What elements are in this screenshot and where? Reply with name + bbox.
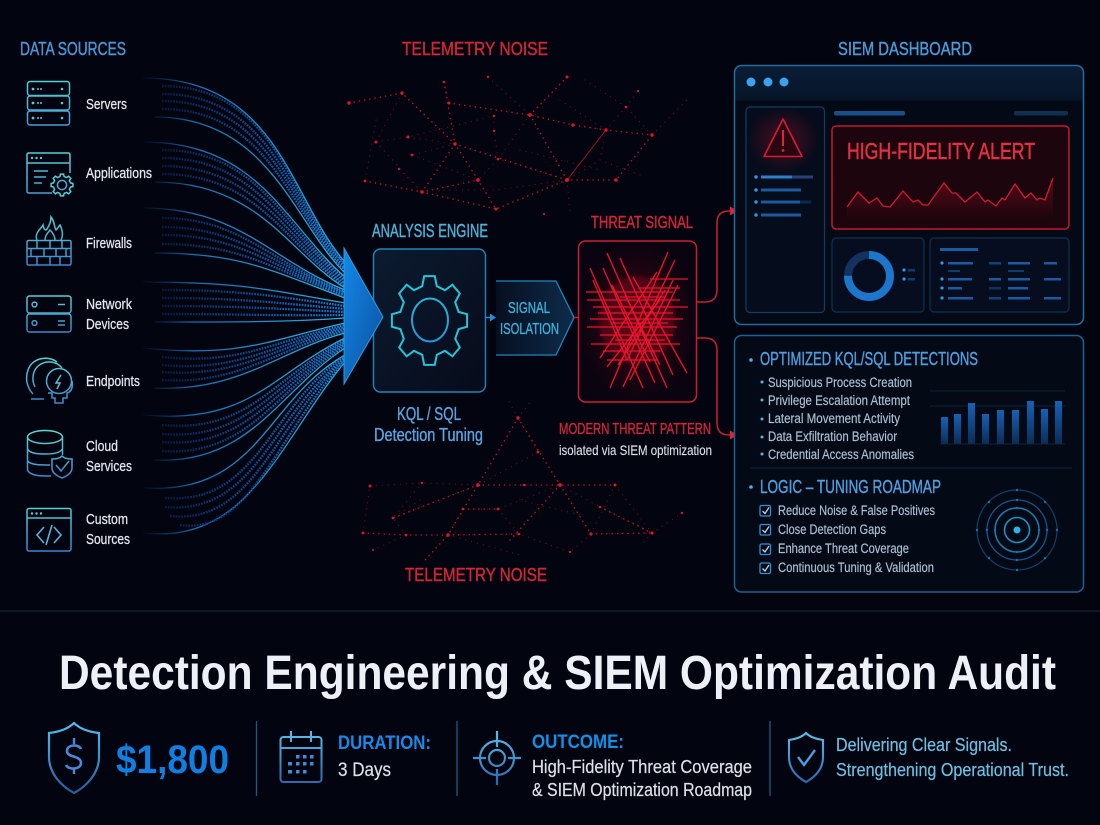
panel: analysis engine (374, 249, 486, 392)
radar target (976, 489, 1058, 571)
footer stats (49, 721, 1069, 800)
stream: applications (143, 142, 345, 288)
label: endpoints: Endpoints (86, 374, 140, 390)
threat pattern lines (586, 252, 688, 388)
arrow: threat to dashboard (697, 206, 738, 302)
duration text (338, 733, 431, 781)
section: optimized detections: Lateral Movement Activity (768, 411, 900, 426)
duration text: DURATION: (338, 733, 431, 754)
section: optimized detections (749, 349, 978, 462)
icon: firewall (27, 217, 71, 265)
icon: gear (392, 276, 467, 365)
tagline text: Delivering Clear Signals. (836, 735, 1012, 755)
icon: network devices (27, 296, 71, 332)
stream: firewalls (143, 208, 345, 298)
sidebar rows (754, 175, 813, 217)
outcome text: High-Fidelity Threat Coverage (532, 757, 752, 777)
caption: modern threat pattern: MODERN THREAT PATTERN (559, 421, 711, 438)
stream: custom sources (143, 355, 345, 534)
donut panel (832, 238, 924, 312)
section: tuning roadmap (749, 477, 941, 575)
connector: isolation to threat (574, 316, 579, 318)
section: optimized detections: Privilege Escalation Attempt (768, 393, 910, 408)
heading: SIEM dashboard: SIEM DASHBOARD (838, 39, 972, 59)
section: tuning roadmap: Reduce Noise & False Positives (778, 503, 935, 518)
caption: modern threat pattern (559, 421, 712, 458)
icon: custom sources (27, 508, 71, 551)
label: network devices (86, 297, 133, 333)
label: applications: Applications (86, 166, 152, 182)
noise network top (347, 76, 687, 215)
icon: crosshair target (473, 731, 521, 785)
checkboxes (760, 506, 770, 574)
icon: servers (28, 82, 70, 125)
signal isolation chevron: ISOLATION (500, 321, 559, 338)
icon: endpoints (27, 358, 72, 403)
bar chart (930, 391, 1065, 444)
heading: analysis engine: ANALYSIS ENGINE (372, 221, 488, 241)
signal isolation chevron (496, 281, 574, 355)
arrow: threat to detections (697, 338, 738, 440)
stream: servers (143, 78, 345, 273)
caption: KQL / SQL detection tuning (374, 404, 483, 445)
heading: threat signal: THREAT SIGNAL (591, 212, 693, 232)
panel: SIEM dashboard (734, 66, 1084, 324)
label: network devices: Devices (86, 317, 129, 333)
duration text: 3 Days (338, 760, 391, 781)
tagline text (836, 735, 1069, 780)
label: firewalls: Firewalls (86, 236, 132, 252)
label: custom sources (86, 512, 130, 548)
section: optimized detections: Credential Access Anomalies (768, 447, 914, 462)
caption: KQL / SQL detection tuning: KQL / SQL (397, 404, 461, 424)
section: tuning roadmap: Enhance Threat Coverage (778, 541, 909, 556)
label: network devices: Network (86, 297, 133, 313)
section: tuning roadmap: Close Detection Gaps (778, 522, 886, 537)
panel: detections and roadmap (734, 336, 1084, 592)
window dots (746, 78, 788, 86)
icon: check shield (789, 733, 823, 782)
stream: cloud services (143, 338, 345, 460)
section: tuning roadmap: LOGIC – TUNING ROADMAP (760, 477, 941, 497)
panel: threat signal (578, 241, 696, 402)
section: optimized detections: Suspicious Process Creation (768, 375, 912, 390)
stat: price (49, 723, 229, 793)
stat: tagline (789, 733, 1069, 782)
sidebar (746, 106, 824, 312)
top bars (834, 111, 1068, 116)
alert heading: HIGH-FIDELITY ALERT (847, 138, 1035, 164)
outcome text: OUTCOME: (532, 732, 624, 753)
donut legend (902, 268, 915, 281)
section: optimized detections: OPTIMIZED KQL/SQL DETECTIONS (760, 349, 978, 369)
donut chart (848, 255, 890, 297)
arrow: engine to isolation (486, 314, 496, 322)
label: cloud services (86, 439, 132, 475)
data source list (27, 82, 152, 551)
label: custom sources: Custom (86, 512, 128, 528)
section: optimized detections: Data Exfiltration Behavior (768, 429, 897, 444)
icon: calendar (280, 731, 322, 782)
icon: applications (27, 153, 73, 196)
caption: modern threat pattern: isolated via SIEM optimization (559, 442, 712, 458)
stream: endpoints (143, 323, 345, 388)
heading: telemetry noise top: TELEMETRY NOISE (402, 39, 548, 59)
noise network bottom (362, 398, 683, 560)
heading: telemetry noise bottom: TELEMETRY NOISE (405, 565, 547, 585)
icon: warning triangle (764, 119, 802, 156)
table panel (930, 238, 1069, 312)
label: cloud services: Cloud (86, 439, 118, 455)
icon: cloud services (28, 430, 72, 478)
icon: dollar shield (49, 723, 99, 793)
stat: outcome (473, 731, 752, 800)
caption: KQL / SQL detection tuning: Detection Tuning (374, 425, 483, 445)
data streams (143, 78, 345, 534)
label: custom sources: Sources (86, 532, 130, 548)
alert line chart (847, 178, 1053, 217)
arrow: streams into engine (344, 248, 383, 384)
outcome text: & SIEM Optimization Roadmap (532, 780, 752, 800)
alert panel (832, 126, 1069, 229)
stream: network devices (143, 282, 345, 322)
tagline text: Strengthening Operational Trust. (836, 760, 1069, 780)
section: tuning roadmap: Continuous Tuning & Validation (778, 560, 934, 575)
heading: data sources: DATA SOURCES (20, 39, 126, 59)
outcome text (532, 732, 752, 800)
signal isolation chevron: SIGNAL (508, 300, 550, 317)
price value: $1,800 (116, 738, 229, 782)
label: cloud services: Services (86, 459, 132, 475)
stat: duration (280, 731, 431, 782)
label: servers: Servers (86, 97, 127, 113)
